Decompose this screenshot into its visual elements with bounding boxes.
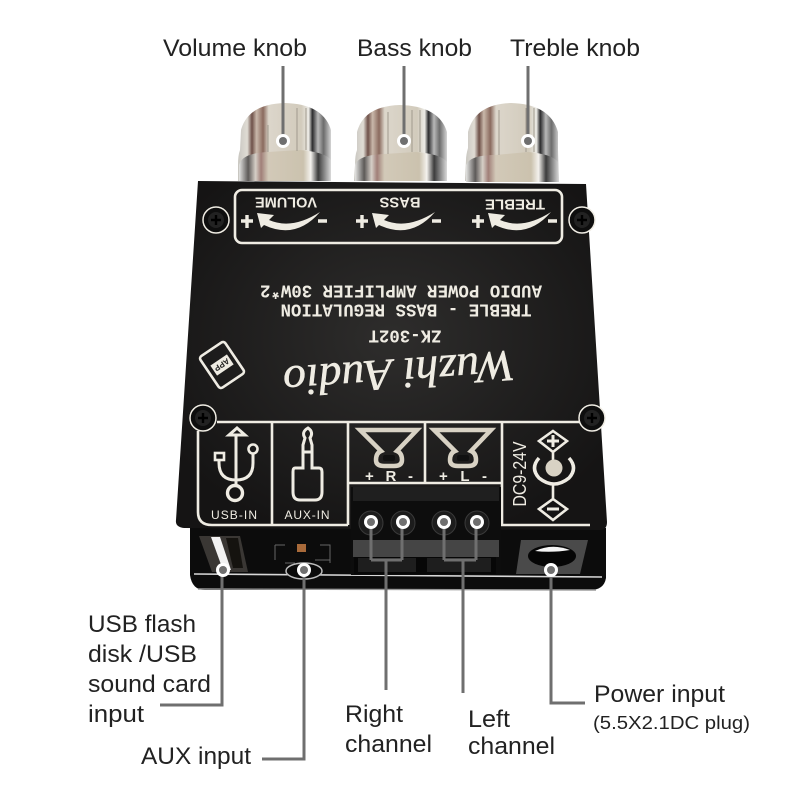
callout: power input: [544, 563, 750, 733]
USB-IN label: USB-IN: [211, 508, 257, 522]
DC voltage label: DC9-24V: [510, 442, 530, 506]
DC power socket: [516, 540, 588, 574]
screw terminal block: [351, 487, 501, 575]
icon: audio jack: [284, 428, 330, 522]
product description text: [260, 280, 542, 344]
icon: app tablet: APP: [212, 356, 231, 373]
bass dial arrow: [356, 212, 441, 230]
top label panel: [235, 190, 562, 243]
knob: volume: [238, 103, 331, 181]
label: treble knob: Treble knob: [510, 35, 640, 62]
label: left channel: channel: [468, 733, 555, 760]
screw: bottom right: [579, 405, 605, 431]
L polarity label: + L -: [439, 468, 487, 485]
BASS silkscreen: BASS: [380, 194, 420, 210]
lower circuit board: [190, 528, 606, 590]
VOLUME silkscreen: VOLUME: [255, 194, 317, 210]
label: AUX input: AUX input: [141, 743, 251, 770]
AUX-IN label: AUX-IN: [284, 508, 330, 522]
callout: volume knob: [163, 35, 307, 148]
screw: bottom left: [190, 405, 216, 431]
USB port: [199, 536, 248, 572]
label: bass knob: Bass knob: [357, 35, 472, 62]
callout: AUX input: [141, 563, 311, 770]
callout: left channel: [437, 515, 555, 760]
label: USB input: USB flash: [88, 611, 196, 638]
label: right channel: Right: [345, 701, 403, 728]
callout: right channel: [345, 515, 432, 758]
TREBLE silkscreen: TREBLE: [485, 196, 545, 212]
icon: app tablet: [199, 341, 245, 389]
bottom connector panel outline: [198, 422, 590, 525]
label: power input: Power input: [594, 681, 725, 708]
callout: treble knob: [510, 35, 640, 148]
AUX jack: [275, 544, 330, 579]
treble dial arrow: [472, 212, 557, 230]
callout: bass knob: [357, 35, 472, 148]
icon: right speaker: [360, 430, 417, 485]
knob: bass: [354, 105, 447, 181]
callout: USB input: [88, 563, 230, 728]
icon: DC power symbol: [510, 431, 574, 520]
R polarity label: + R -: [365, 468, 413, 485]
label: volume knob: Volume knob: [163, 35, 307, 62]
regulation line: TREBLE - BASS REGULATION: [280, 298, 532, 318]
label: USB input: sound card: [88, 671, 211, 698]
icon: left speaker: [434, 430, 491, 485]
model number: ZK-302T: [368, 324, 442, 344]
screw: top left: [203, 207, 229, 233]
label: plug size: (5.5X2.1DC plug): [593, 713, 750, 733]
icon: USB: [211, 428, 258, 522]
brand signature: Wuzhi Audio: [282, 341, 517, 406]
label: left channel: Left: [468, 706, 510, 733]
screw: top right: [569, 207, 595, 233]
label: USB input: disk /USB: [88, 641, 197, 668]
amplifier line: AUDIO POWER AMPLIFIER 30W*2: [260, 280, 542, 300]
volume dial arrow: [241, 212, 327, 230]
label: right channel: channel: [345, 731, 432, 758]
top plate: [176, 181, 607, 530]
label: USB input: input: [88, 701, 144, 728]
knob: treble: [465, 103, 559, 182]
